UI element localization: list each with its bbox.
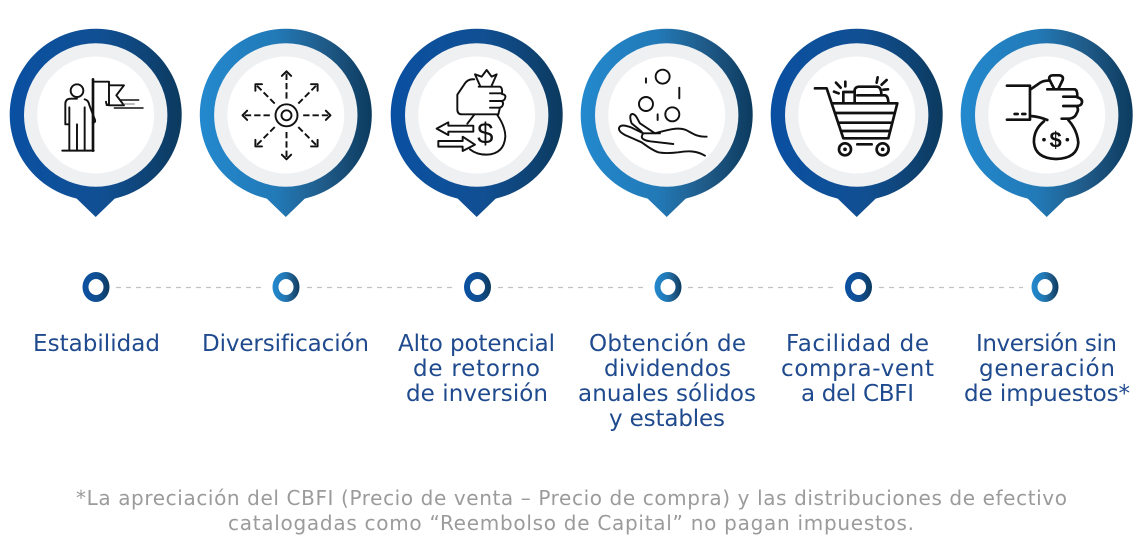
pin 2: Diversificación xyxy=(200,29,372,217)
label: Obtención de dividendos anuales sólidos y estables: anuales sólidos xyxy=(578,381,756,407)
timeline dot 5 xyxy=(845,272,872,302)
label: Inversión sin generación de impuestos: Inversión sin xyxy=(976,331,1117,357)
label: Inversión sin generación de impuestos xyxy=(964,331,1130,407)
label: Obtención de dividendos anuales sólidos y estables xyxy=(578,331,756,432)
timeline dot 4 xyxy=(654,272,682,302)
timeline dot 1 xyxy=(82,272,110,302)
label: Obtención de dividendos anuales sólidos y estables: y estables xyxy=(609,406,725,432)
icon: arrows radiating from a target xyxy=(243,71,330,159)
icon: coins falling into open hand xyxy=(619,70,707,156)
label: Inversión sin generación de impuestos: generación xyxy=(979,356,1115,382)
label: Inversión sin generación de impuestos: de impuestos* xyxy=(964,381,1130,407)
pin 5: Facilidad de compra-venta xyxy=(771,29,943,217)
timeline dot 6 xyxy=(1032,272,1058,302)
timeline dot 2 xyxy=(272,272,300,302)
footnote: *La apreciación del CBFI (Precio de venta – Precio de compra) y las distribuciones de efectivo xyxy=(76,486,1067,510)
label: Facilidad de compra-venta del CBFI: a del CBFI xyxy=(801,381,914,407)
icon: shopping cart xyxy=(815,77,897,155)
label: Obtención de dividendos anuales sólidos y estables: dividendos xyxy=(604,356,731,382)
timeline: dashed connector lines xyxy=(116,286,1023,288)
label: Estabilidad: Estabilidad xyxy=(33,331,160,357)
pin 1: Estabilidad xyxy=(10,29,182,217)
pin 6: Inversión sin impuestos xyxy=(961,29,1133,217)
icon: money bag held in hand with arrows: $ xyxy=(477,118,493,151)
label: Facilidad de compra-venta del CBFI: Facilidad de xyxy=(786,331,929,357)
label: Facilidad de compra-venta del CBFI: compra-vent xyxy=(781,356,934,382)
icon: money bag held in hand with arrows xyxy=(437,70,505,155)
label: Alto potencial de retorno de inversión: de retorno xyxy=(413,356,540,382)
label: Diversificación: Diversificación xyxy=(202,331,369,357)
label: Facilidad de compra-venta del CBFI xyxy=(781,331,934,407)
label: Alto potencial de retorno de inversión: de inversión xyxy=(406,381,548,407)
label: Alto potencial de retorno de inversión: Alto potencial xyxy=(398,331,555,357)
icon: person with flag xyxy=(62,79,143,151)
icon: hand holding money bag: $ xyxy=(1050,128,1062,153)
pin 4: Obtención de dividendos xyxy=(581,29,753,217)
footnote: catalogadas como “Reembolso de Capital” no pagan impuestos. xyxy=(228,511,914,535)
footnote xyxy=(76,486,1067,535)
icon: hand holding money bag xyxy=(1007,75,1082,159)
timeline dot 3 xyxy=(464,272,491,302)
label: Alto potencial de retorno de inversión xyxy=(398,331,555,407)
label: Obtención de dividendos anuales sólidos y estables: Obtención de xyxy=(589,331,746,357)
pin 3: Alto potencial xyxy=(391,29,563,217)
